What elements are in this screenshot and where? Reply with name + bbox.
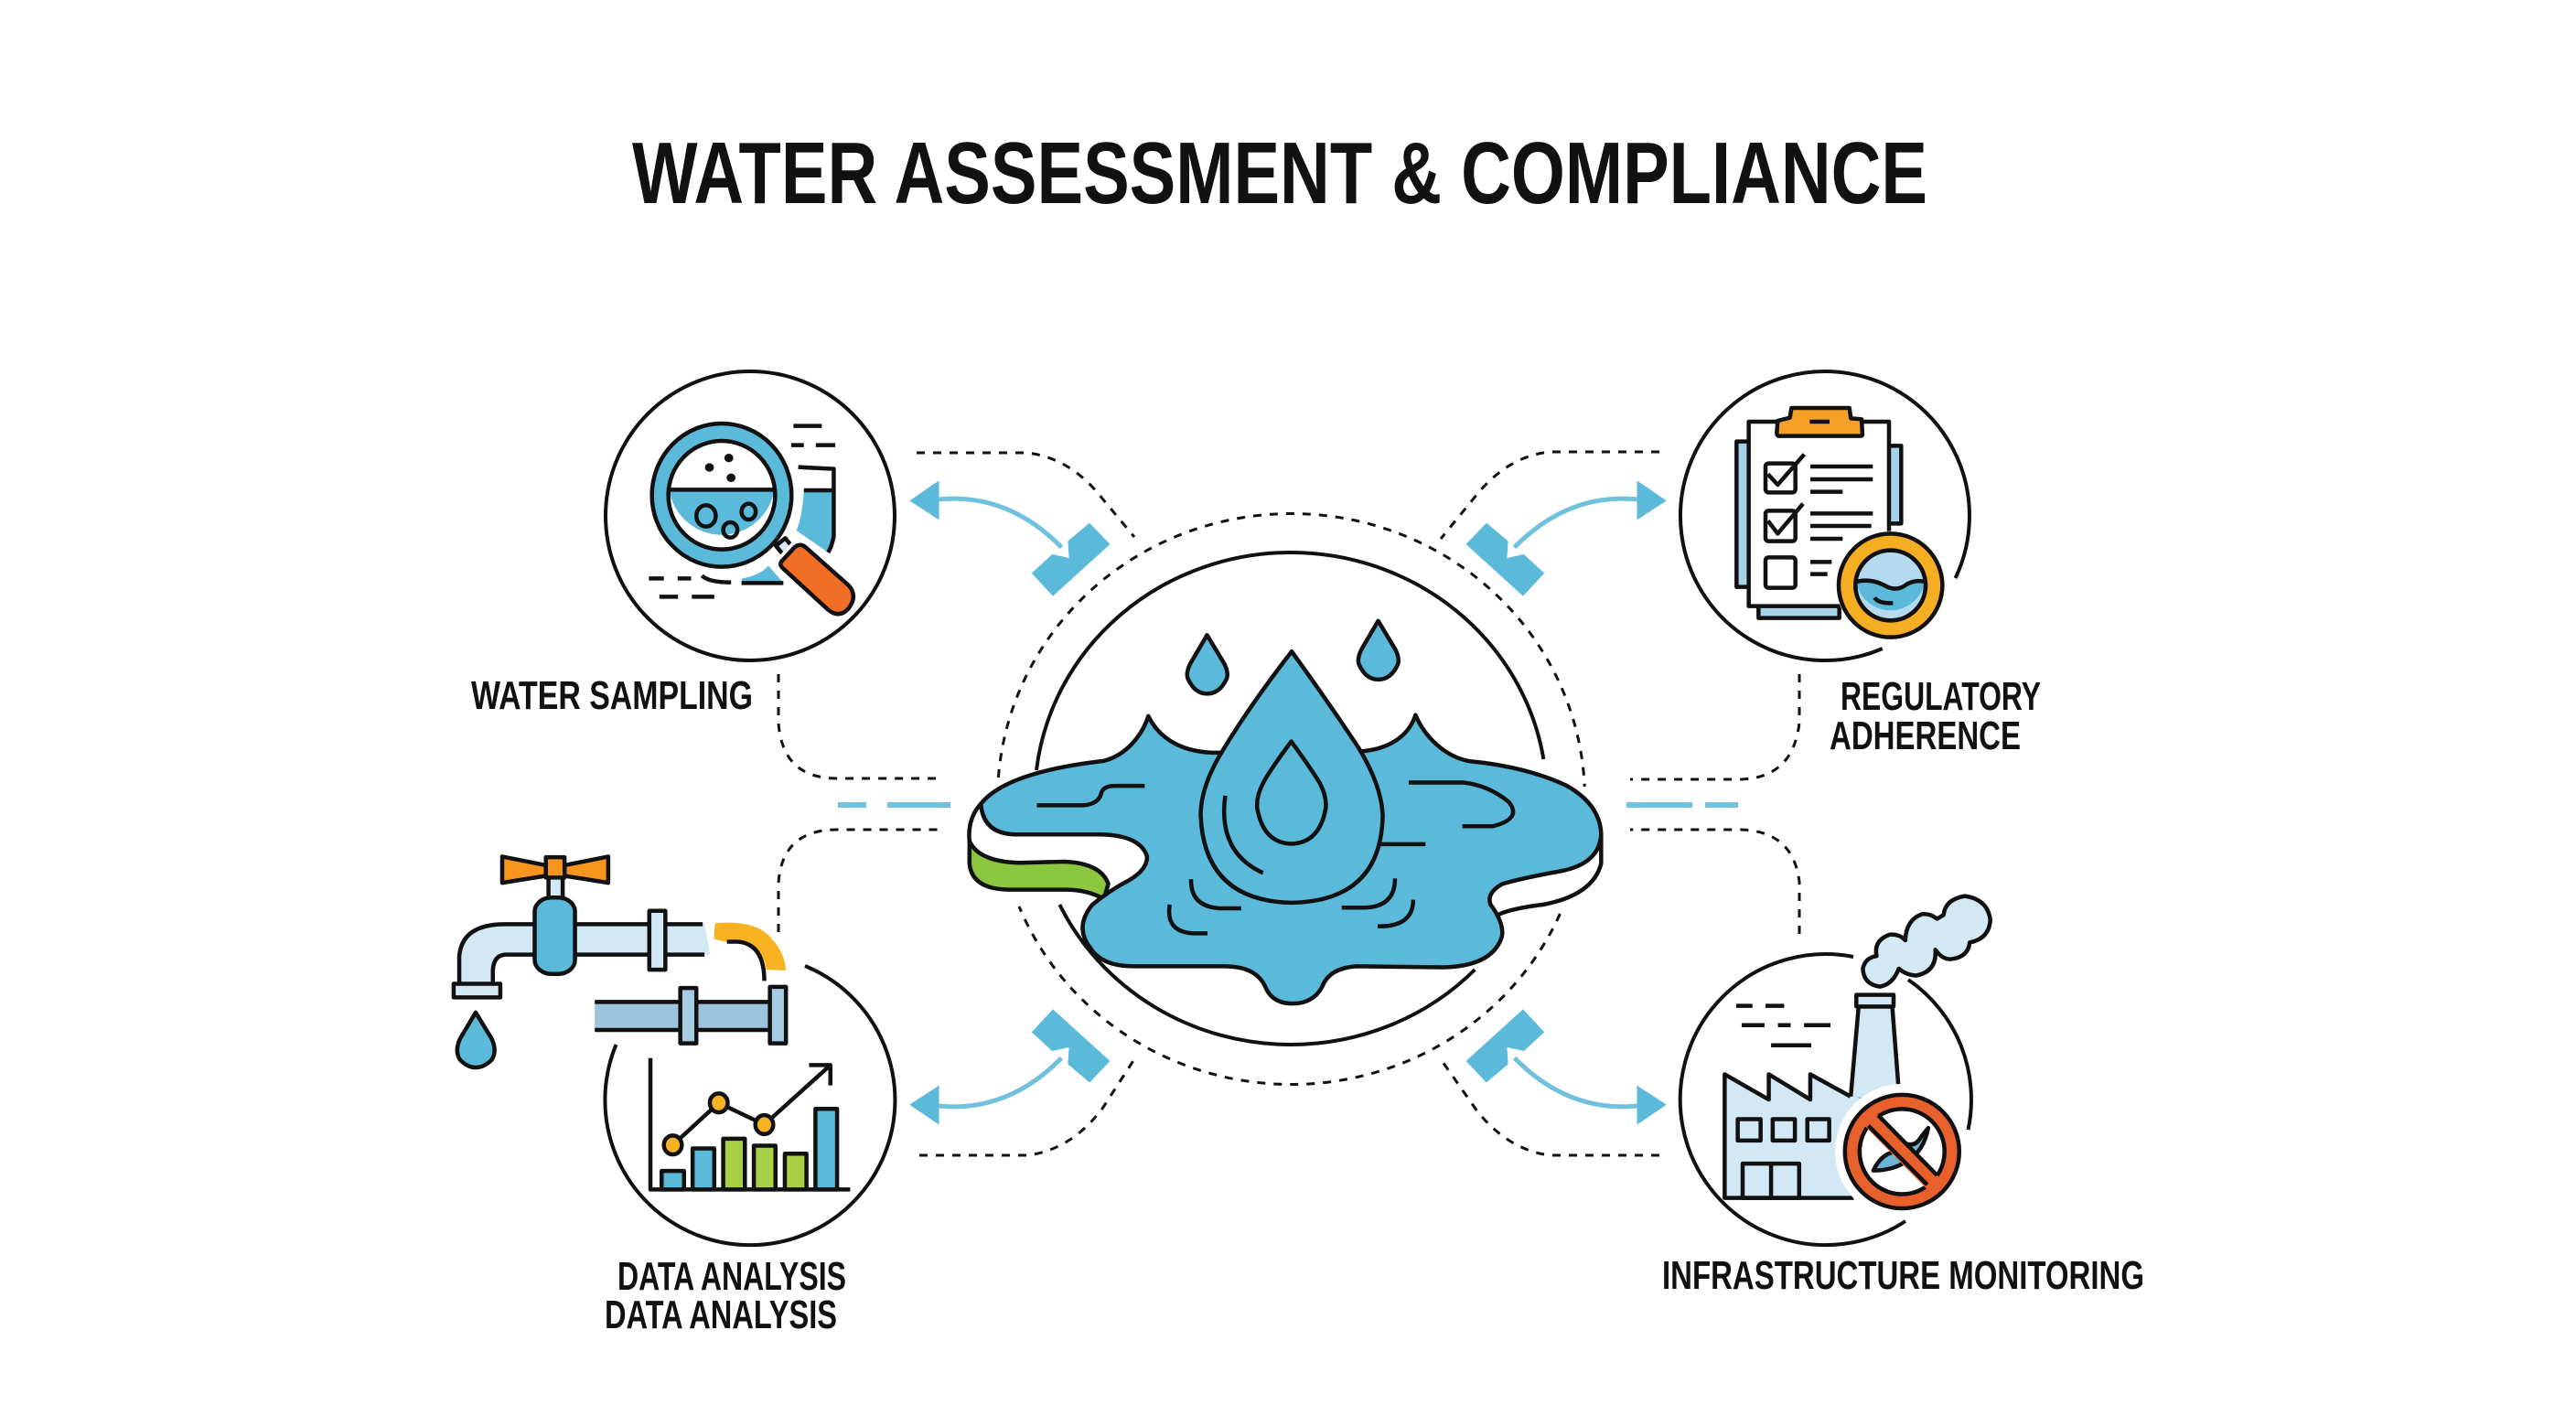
node: infrastructure monitoring [1662,896,2144,1298]
ring [606,371,895,660]
right edge outline [1497,833,1601,915]
label: INFRASTRUCTURE MONITORING [1662,1253,2144,1298]
ring [1680,371,1970,660]
puddle [981,715,1601,1003]
arrow: bottom right [1466,1009,1667,1125]
arrow: bottom left [909,1009,1110,1125]
node: water sampling [471,371,895,718]
ring [605,966,895,1245]
arrow: top right [1466,480,1667,596]
outer dashed ring [998,514,1584,1085]
title: WATER ASSESSMENT & COMPLIANCE [632,124,1927,222]
node: data analysis [454,856,895,1337]
white puddle edge, right [1490,833,1601,915]
arrow: top left [909,480,1110,596]
left edge outline [969,804,981,842]
main water drop [1201,651,1383,903]
green band [970,842,1109,899]
label: WATER SAMPLING [471,673,753,718]
icon: magnifier over beaker [647,418,853,614]
small drop left [1187,635,1228,693]
label line two: ADHERENCE [1830,713,2021,758]
label line one: DATA ANALYSIS [617,1254,846,1299]
ring [1680,954,1971,1245]
icon: tap and pipes [454,856,786,1067]
node: regulatory adherence [1680,371,2041,758]
icon: factory with smoke and prohibition sign [1724,896,1991,1219]
chart: bars and trend line [650,1058,850,1189]
small drop right [1358,621,1399,680]
central water illustration [969,621,1601,1003]
puddle ripples [1036,783,1513,933]
light blue flow dashes [838,802,1738,808]
dotted connectors [778,452,1799,1155]
label line two: DATA ANALYSIS [605,1292,837,1337]
central ring [1036,552,1543,1045]
drop highlight curve [1224,796,1263,873]
inner drop [1257,742,1326,843]
label line one: REGULATORY [1841,674,2041,719]
icon: clipboard and water badge [1736,408,1945,639]
white puddle edge, left [969,804,1147,899]
